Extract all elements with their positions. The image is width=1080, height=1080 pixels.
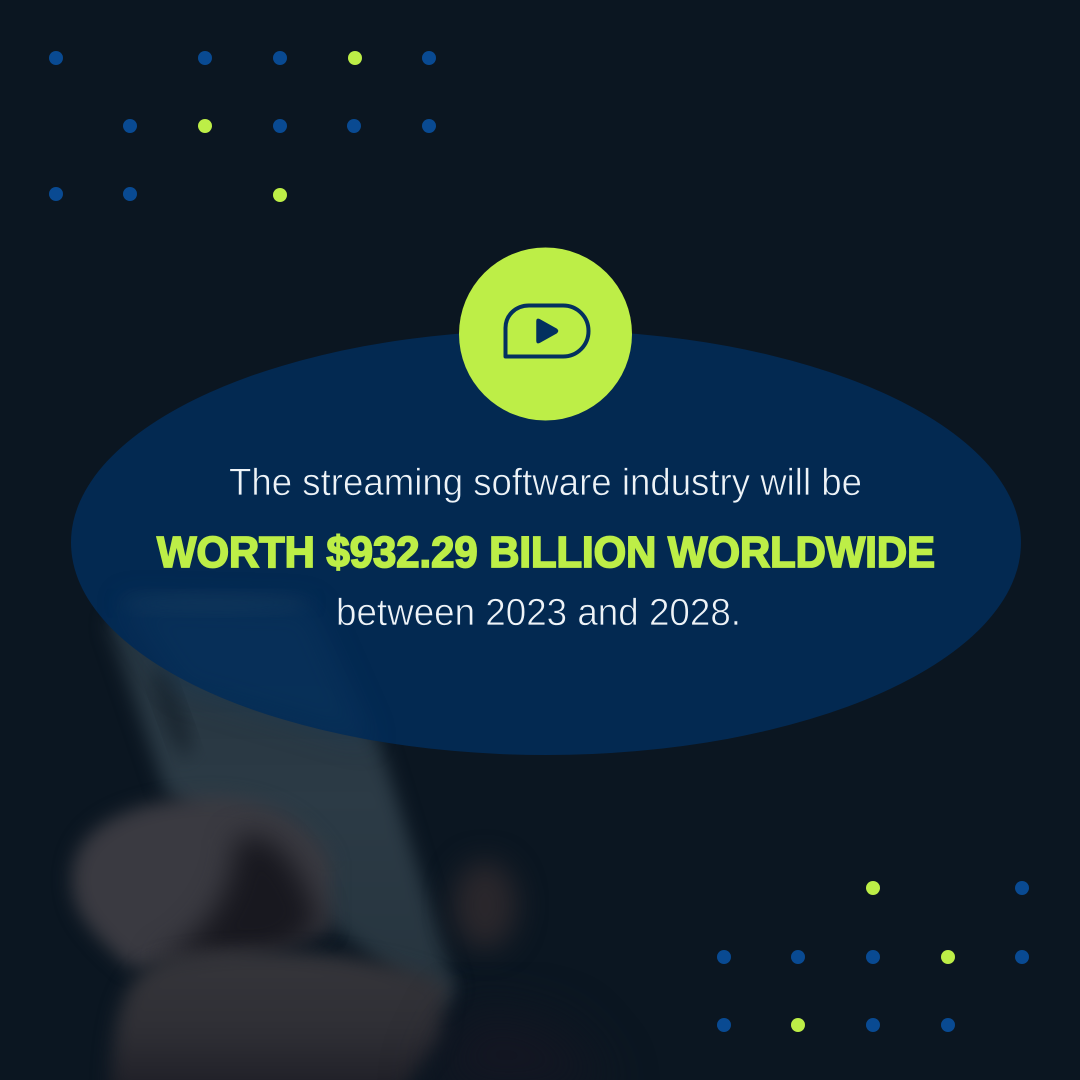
upper finger xyxy=(72,797,330,968)
lower finger xyxy=(110,951,448,1080)
blurred photo: hand holding phone xyxy=(64,623,523,1080)
decorative dots: bottom right xyxy=(717,881,1029,1032)
oval panel xyxy=(71,330,1021,755)
icon: play speech bubble xyxy=(506,306,588,356)
text line 3: between 2023 and 2028. xyxy=(336,592,741,634)
phone body xyxy=(108,590,456,1010)
blurred phone highlight seen through the oval xyxy=(120,594,372,745)
decorative dots: top left xyxy=(49,51,436,202)
phone camera shadow xyxy=(154,678,190,749)
far fingertip xyxy=(453,861,517,949)
palm shadow xyxy=(430,1010,610,1080)
finger shadow xyxy=(150,836,320,962)
headline: WORTH $932.29 BILLION WORLDWIDE xyxy=(157,528,935,577)
icon badge: green circle with play bubble xyxy=(459,248,632,420)
text line 1: The streaming software industry will be xyxy=(229,462,862,504)
